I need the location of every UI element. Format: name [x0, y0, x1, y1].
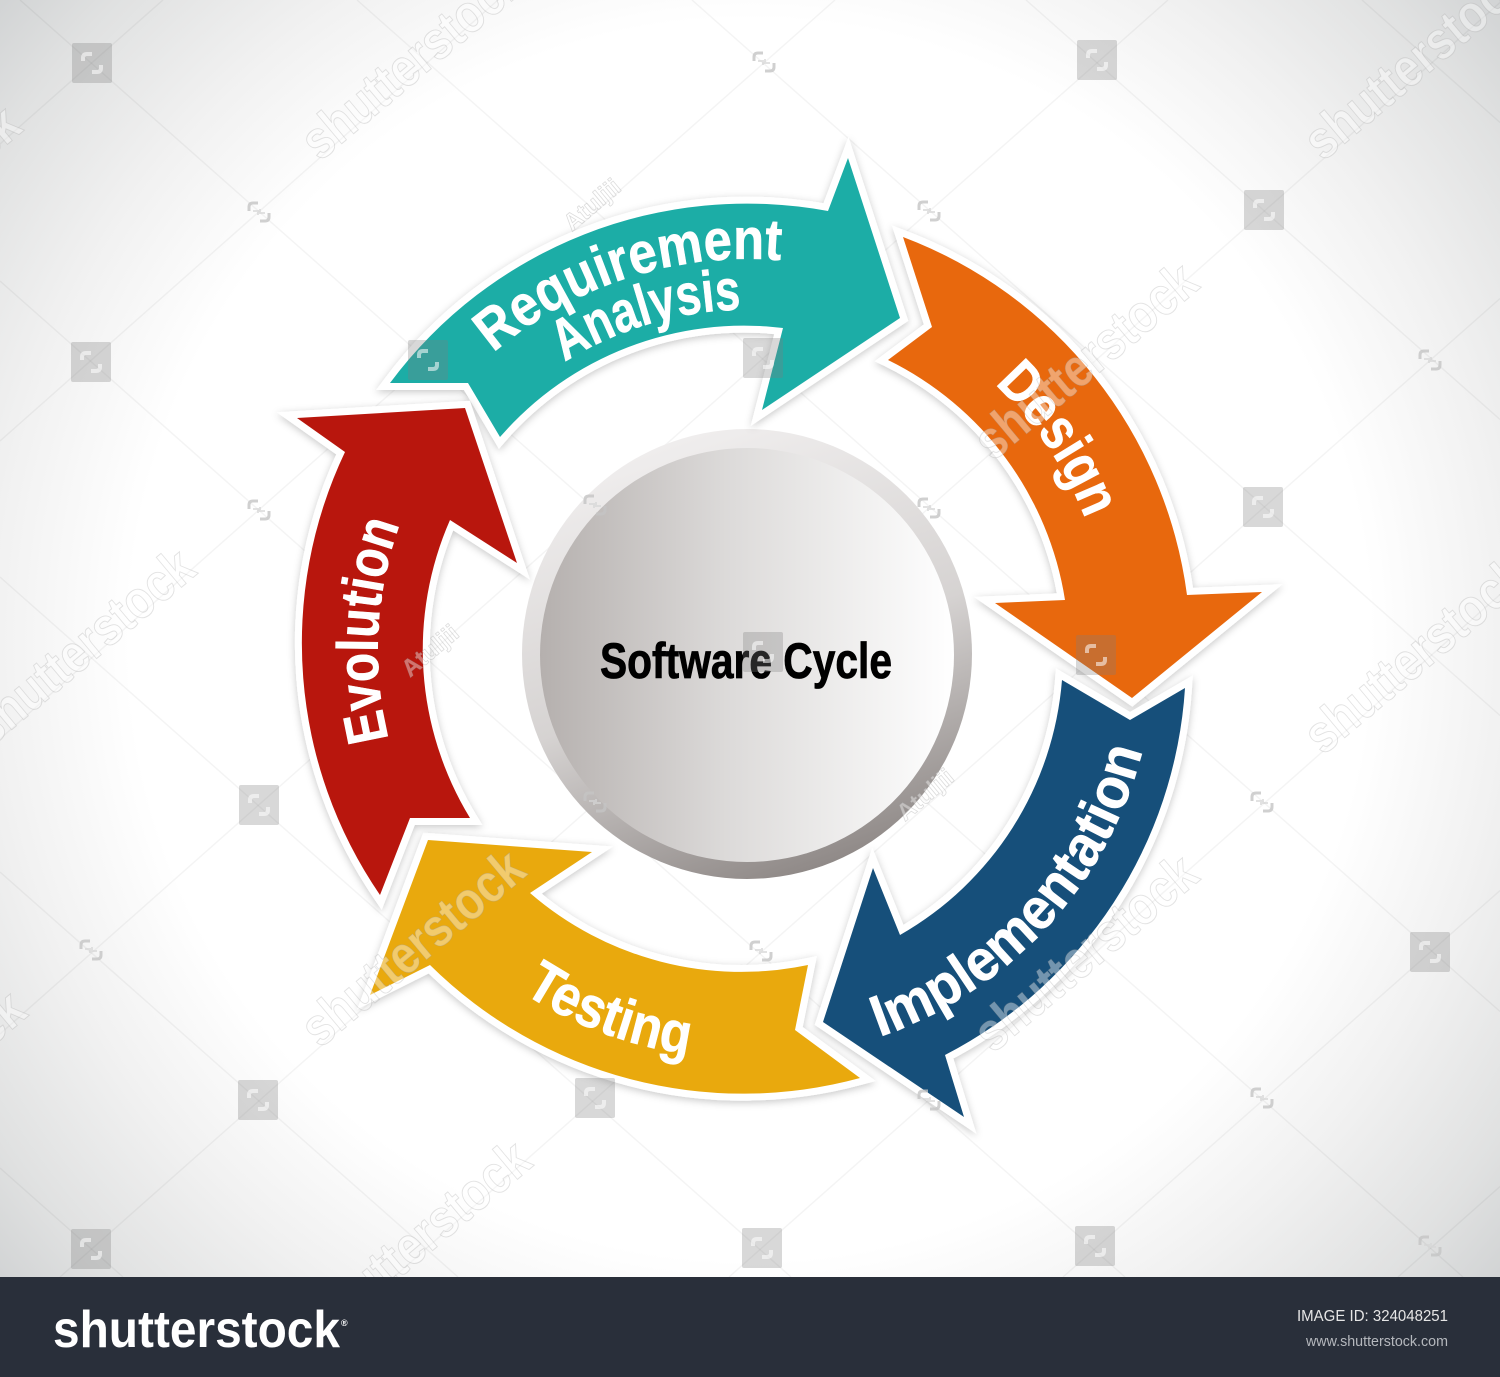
arrow: Implementation [812, 669, 1196, 1136]
footer logo: shutterstock [53, 1301, 340, 1359]
central circle: Software Cycle [522, 429, 972, 879]
arrow: Implementation: Implementation [868, 747, 1142, 1036]
arrow: Design: Design [996, 358, 1111, 516]
arrow: Testing: Testing [532, 958, 690, 1065]
arrow: Evolution: Evolution [335, 520, 399, 744]
arrow: Requirement Analysis: Analysis [556, 269, 739, 362]
watermark text: shutterstock [962, 250, 1210, 471]
watermark text: Atuljii [559, 173, 626, 237]
arrow: Evolution [278, 399, 532, 912]
arrow: Design [874, 226, 1282, 710]
watermark small icons [81, 53, 1440, 1255]
arrow: Requirement Analysis: Requirement [470, 222, 782, 351]
watermark text: shutterstock [962, 842, 1210, 1063]
center label: Software Cycle [600, 633, 892, 689]
registered mark: ® [341, 1318, 348, 1328]
watermark text: Atuljii [892, 763, 959, 827]
site url: www.shutterstock.com [1305, 1334, 1448, 1350]
arrow: Testing [356, 831, 876, 1106]
watermark text: shutterstock [295, 1128, 543, 1349]
image id: IMAGE ID: 324048251 [1297, 1308, 1448, 1325]
arrow: Requirement Analysis [376, 138, 910, 452]
watermark text: Atuljii [397, 619, 464, 683]
footer bar [0, 1277, 1500, 1377]
watermark text: shutterstock [289, 837, 537, 1058]
